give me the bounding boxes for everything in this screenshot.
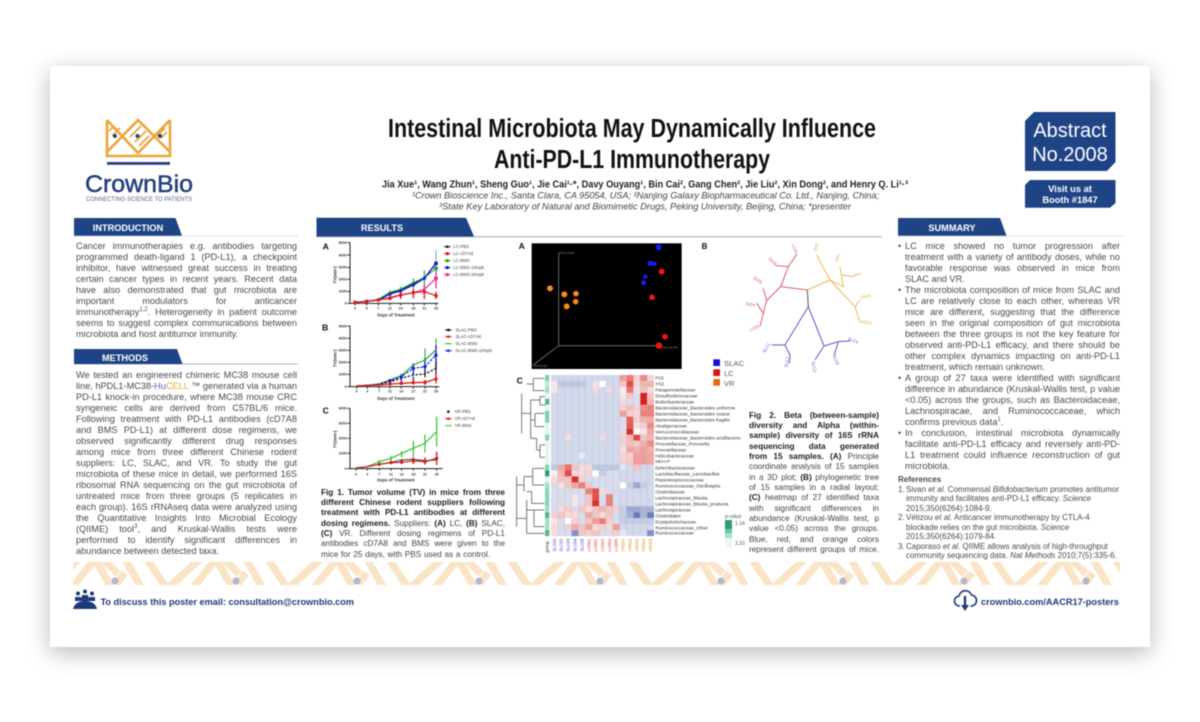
chart C: VR tumor volume: 1000 [339, 452, 347, 456]
chart B: SLAC tumor volume: 3000 [339, 349, 347, 353]
chart C: VR tumor volume: 11 [389, 472, 393, 476]
text: references: 3. [898, 542, 905, 550]
text: methods [76, 370, 298, 556]
fig 2 panel B: phylogenetic tree: VR1 [813, 242, 820, 252]
chart C: VR tumor volume: TV(mm³) [333, 430, 338, 448]
text: • [898, 241, 901, 251]
heading: introduction: INTRODUCTION [93, 223, 164, 233]
text: references: community sequencing data. Nat Methods 2010;7(5):335-6. [906, 551, 1117, 560]
legend: SLAC, LC, VR groups: VR [724, 379, 735, 388]
booth badge: Booth #1847 [1042, 195, 1098, 205]
text: summary bullets: LC mice showed no tumor progression after [905, 241, 1120, 251]
legend A: LC-BMS-10mpk [453, 265, 485, 270]
heatmap row labels [655, 375, 741, 536]
text: methods: performed to identify significant differences in [76, 535, 297, 545]
chart A: LC tumor volume: A [323, 241, 330, 251]
heatmap row labels: Ruminococcaceae [655, 531, 694, 536]
text: methods: We tested an engineered chimeric MC38 mouse cell [76, 370, 297, 380]
text: methods: each group). 16S rRNAseq data were analyzed using [76, 502, 297, 512]
poster sheet [50, 66, 1150, 647]
caption: figure 1: treatment with PD-L1 antibodies at different [321, 508, 505, 517]
legend C [445, 409, 476, 428]
caption: figure 2 [748, 410, 880, 554]
chart C: VR tumor volume: 21 [423, 472, 427, 476]
text: introduction: microbiota and host antitumor immunity. [76, 329, 238, 339]
heading: methods [74, 349, 298, 364]
caption: figure 2: Blue, red, and orange colors [749, 535, 879, 544]
fig 2 panel A: 3D PCoA scatter plot: PC2 13.9% [559, 251, 575, 255]
chart A: LC tumor volume: 3000 [339, 266, 347, 270]
chart A: LC tumor volume: 18 [411, 306, 415, 310]
chart A: LC tumor volume: 5000 [339, 241, 347, 245]
caption: figure 2: from 15 samples. (A) Principle [749, 452, 879, 461]
abstract number badge [1025, 112, 1116, 171]
chart C: VR tumor volume: 4000 [339, 407, 347, 411]
legend A: LC-cD7A8 [453, 251, 474, 256]
heatmap row labels: Bacteroidaceae_Bacteroides acidifaciens [655, 436, 741, 441]
fig 2 panel B: phylogenetic tree: VR12 [860, 293, 872, 300]
text: methods: (QIIME) tool3, and Kruskal-Wallis tests were [76, 524, 297, 534]
chart A: LC tumor volume: 0 [345, 302, 347, 306]
chart A: LC tumor volume: 25 [434, 306, 438, 310]
title: Intestinal Microbiota May Dynamically Influence [388, 115, 876, 143]
heatmap dendrogram [517, 378, 545, 533]
heatmap row labels: Alcaligenaceae [655, 424, 687, 429]
heatmap row labels: Deferribacteraceae [655, 466, 695, 471]
chart C: VR tumor volume: 7 [378, 472, 380, 476]
chart B: SLAC tumor volume: 2000 [339, 361, 347, 365]
caption: figure 2: sequencing data generated [749, 442, 879, 451]
text: methods: microbiota of these mice in detail, we performed 16S [76, 469, 297, 479]
heatmap column labels: SLC02 [559, 538, 564, 552]
fig 2 panel B: phylogenetic tree: S004 [745, 301, 756, 308]
text: references: 2015;350(6264):1079-84. [906, 532, 996, 541]
heatmap column labels: VR003 [634, 538, 639, 552]
heatmap cells [551, 375, 654, 536]
text: summary bullets: treatment with a variety of antibody doses, while no [905, 252, 1120, 262]
abstract number badge: Abstract [1033, 120, 1107, 142]
chart A: LC tumor volume: 1000 [339, 290, 347, 294]
legend A: LC-BMS-20mpk [453, 272, 485, 277]
caption: figure 1: mice for 25 days, with PBS used as a control. [321, 550, 490, 559]
legend C: VR-PBS [455, 409, 471, 414]
fig 2 panel A: 3D PCoA scatter plot: A [519, 241, 526, 251]
caption: figure 1: dosing regimens. Suppliers: (A) LC, (B) SLAC, [321, 519, 505, 528]
chart A: LC tumor volume: 5 [366, 306, 368, 310]
heatmap row labels: Bacteroidaceae_Bacteroides uniformis [655, 406, 736, 411]
text: summary bullets [898, 241, 1120, 471]
fig 2 panel A: 3D PCoA scatter plot: PC1 25.4% [663, 345, 678, 349]
chart A: LC tumor volume: 7 [377, 306, 379, 310]
heatmap row labels: Lactobacillaceae_Lactobacillus [655, 472, 720, 477]
text: methods: ribosomal RNA sequencing on the gut microbiota of [76, 480, 297, 490]
heatmap column labels: LC005 [614, 538, 619, 552]
heatmap column labels: VR004 [641, 538, 646, 552]
group colour column [545, 375, 549, 536]
caption: figure 2: sample) diversity of 16S rRNA [749, 431, 879, 440]
heatmap row labels: Erysipelotrichaceae [655, 519, 696, 524]
heading: results [316, 218, 882, 237]
legend B: SLAC-BMS [455, 341, 478, 346]
legend A: LC-PBS [453, 244, 469, 249]
legend A [444, 244, 485, 277]
decorative pattern band [73, 562, 1120, 585]
icon: people at table [73, 590, 97, 609]
chart A: LC tumor volume: 0 [354, 306, 356, 310]
chart C: VR tumor volume: Days of Treatment [377, 478, 415, 483]
text: references: Vétizou et al. Anticancer immunotherapy by CTLA-4 [906, 513, 1090, 522]
legend: SLAC, LC, VR groups: LC [724, 369, 734, 378]
text: summary bullets: treatment, which remain unknown. [905, 362, 1045, 372]
heatmap column labels: LC004 [607, 538, 612, 552]
chart B: SLAC tumor volume: 4 [366, 390, 369, 394]
text: summary bullets: A group of 27 taxa were identified with significant [905, 373, 1120, 383]
logo: CrownBio: CrownBio [85, 171, 193, 198]
text: • [898, 285, 901, 295]
text: references: References [898, 475, 941, 484]
text: methods: line, hPDL1-MC38-HuCELL ™ generated via a human [76, 381, 297, 391]
heatmap row labels: Helicobacteraceae [655, 454, 694, 459]
caption: figure 2: in a 3D plot; (B) phylogenetic tree [749, 473, 879, 482]
heatmap row labels: Peptostreptococcaceae [655, 477, 704, 482]
caption: figure 1: (C) VR. Different dosing regimens of PD-L1 [321, 529, 505, 538]
heatmap row labels: Bacteroidaceae_Bacteroides ovatus [655, 411, 731, 416]
heatmap column labels: VR005 [648, 538, 653, 552]
text: summary bullets: microbiota. [905, 461, 950, 471]
caption: figure 2: value <0.05) across the groups. [749, 524, 879, 533]
text: summary bullets: The microbiota composition of mice from SLAC and [905, 285, 1120, 295]
text: references [898, 475, 1120, 560]
heatmap row labels: Lachnospiraceae_Blautia_producta [655, 501, 729, 506]
p-value colour bar: 1.14 [735, 521, 745, 527]
icon: cloud download [954, 591, 977, 611]
caption: figure 2: abundance (Kruskal-Wallis test, p [749, 514, 879, 523]
chart B: SLAC tumor volume: TV(mm³) [333, 349, 338, 367]
fig 1 line charts [322, 241, 493, 483]
caption: figure 1 [320, 488, 506, 560]
caption: figure 1: different Chinese rodent suppliers following [321, 498, 505, 507]
chart B: SLAC tumor volume: 25 [434, 390, 438, 394]
chart B: SLAC tumor volume: 4000 [339, 337, 347, 341]
heatmap column labels: LC001 [586, 538, 591, 552]
chart A: LC tumor volume: 11 [388, 306, 392, 310]
fig 2 panel B: phylogenetic tree: SLC7 [783, 356, 790, 368]
legend C: VR-BMS [455, 423, 472, 428]
chart C: VR tumor volume: 3000 [339, 422, 347, 426]
text: references: Caporaso et al. QIIME allows analysis of high-throughput [906, 542, 1108, 550]
legend: SLAC, LC, VR groups: SLAC [724, 359, 745, 368]
affiliations [412, 190, 879, 212]
fig 2 panel C: heatmap: C [517, 375, 524, 385]
legend C: VR-cD7A8 [455, 416, 476, 421]
heatmap row labels: Prevotellaceae [655, 448, 687, 453]
chart C: VR tumor volume [323, 405, 476, 483]
text: summary bullets: L1 treatment could influence reconstruction of gut [905, 450, 1120, 460]
chart A: LC tumor volume: Days of Treatment [377, 313, 415, 318]
chart B: SLAC tumor volume: 14 [399, 390, 404, 394]
text: summary bullets: In conclusion, intestinal microbiota dynamically [905, 428, 1120, 438]
fig 2 panel B: phylogenetic tree: VR7 [834, 252, 842, 263]
chart C: VR tumor volume: 4 [366, 472, 369, 476]
text: summary bullets: seen in the original composition of gut microbiota [905, 318, 1120, 328]
text: methods: the Quantitative Insights Into Microbial Ecology [76, 513, 297, 523]
text: summary bullets: Lachnospiracae, and Ruminococcaceae, which [905, 406, 1120, 416]
text: introduction: important modulators for anticancer [76, 296, 297, 306]
caption: figure 1: antibodies cD7A8 and BMS were given to the [321, 539, 505, 548]
heatmap column labels: SLC03 [566, 538, 571, 552]
heatmap column labels: group [545, 540, 550, 553]
caption: figure 1: Fig 1. Tumor volume (TV) in mice from three [321, 488, 505, 496]
text: references: 2015;350(6264):1084-9. [906, 504, 992, 512]
fig 2 panel B: phylogenetic tree: S006 [767, 256, 778, 267]
text: • [898, 428, 901, 438]
chart C: VR tumor volume: 2000 [339, 437, 347, 441]
logo: CrownBio [85, 120, 193, 203]
chart C: VR tumor volume: C [323, 405, 330, 415]
text: methods: observed significantly different drug responses [76, 436, 297, 446]
text: summary bullets: favorable response was observed in mice from [905, 263, 1120, 273]
fig 2 panel B: phylogenetic tree: VR4 [852, 271, 862, 279]
heatmap row labels: Lachnospiraceae [655, 507, 691, 512]
legend B: SLAC-PBS [455, 327, 477, 332]
text: methods: untreated mice from three groups (5 replicates in [76, 491, 297, 501]
text: references: Sivan et al. Commensal Bifidobacterium promotes antitumor [906, 484, 1119, 494]
fig 2 panel B: phylogenetic tree: VR13 [861, 319, 872, 325]
heatmap row labels: Clostridiaceae [655, 489, 685, 494]
fig 2 panel B: phylogenetic tree: LC03 [791, 243, 799, 255]
heatmap row labels: NKH-P [655, 459, 670, 464]
heatmap row labels: Lachnospiraceae_Blautia [655, 495, 708, 500]
text: references: 1. [898, 484, 905, 494]
caption: figure 2: (C) heatmap of 27 identified taxa [749, 493, 879, 502]
affiliations: ¹Crown Bioscience Inc., Santa Clara, CA 95054, USA; ²Nanjing Galaxy Biopharmaceutical Co. Ltd., Nanjing, China; [412, 190, 879, 200]
caption: figure 2: diversity and Alpha (within- [749, 421, 879, 430]
heatmap row labels: Desulfovibrionaceae [655, 393, 698, 398]
chart C: VR tumor volume: 18 [411, 472, 415, 476]
text: methods: Following treatment with PD-L1 antibodies (cD7A8 [76, 414, 297, 424]
chart A: LC tumor volume: 21 [422, 306, 426, 310]
text: summary bullets: other complex dynamics impacting on anti-PD-L1 [905, 351, 1120, 361]
fig 2 panel B: phylogenetic tree: SLC9 [832, 354, 840, 366]
text: introduction: immunotherapy1,2. Heterogeneity in patient outcome [76, 307, 297, 317]
text: references: 2. [898, 513, 905, 522]
caption: figure 2: with significant differences in [749, 504, 879, 513]
text: methods: syngeneic cells are derived from C57BL/6 mice. [76, 403, 297, 413]
heatmap column labels: LC002 [593, 538, 598, 552]
chart A: LC tumor volume: 14 [399, 306, 404, 310]
chart B: SLAC tumor volume: 21 [423, 390, 427, 394]
title [388, 115, 876, 174]
chart C: VR tumor volume: 14 [400, 472, 405, 476]
fig 2 panel C: heatmap [517, 375, 741, 553]
logo: CrownBio: CONNECTING SCIENCE TO PATIENTS [86, 196, 192, 203]
fig 2 panel B: phylogenetic tree [702, 242, 872, 373]
chart B: SLAC tumor volume: 0 [345, 385, 347, 389]
chart C: VR tumor volume: 0 [345, 467, 347, 471]
chart B: SLAC tumor volume: Days of Treatment [377, 396, 415, 401]
fig 2 panel B: phylogenetic tree: B [702, 242, 708, 251]
text: summary bullets: observed anti-PD-L1 efficacy, and there should be [905, 340, 1120, 350]
heatmap column labels [545, 538, 653, 553]
heatmap column labels: VR001 [621, 538, 626, 552]
caption: figure 2: Fig 2. Beta (between-sample) [749, 410, 879, 420]
footer: contact email: To discuss this poster email: consultation@crownbio.com [100, 597, 354, 608]
text: summary bullets: between the three groups is not the key feature for [905, 329, 1120, 339]
heatmap row labels: Butleribacteraceae [655, 399, 695, 404]
text: introduction: have also demonstrated that gut microbiota are [76, 285, 297, 295]
heatmap row labels: P15 [655, 375, 664, 380]
fig 2 panel A: 3D PCoA scatter plot [519, 241, 682, 369]
fig 2 panel B: phylogenetic tree: SLC1 [762, 341, 772, 354]
chart A: LC tumor volume: TV(mm³) [333, 266, 338, 284]
legend A: LC-BMS [453, 258, 470, 263]
text: introduction [76, 241, 298, 340]
heatmap row labels: Bacteroidaceae_Bacteroides fragilis [655, 417, 730, 422]
text: methods: among mice from three different Chinese rodent [76, 447, 297, 457]
text: summary bullets: mice are different, suggesting that the difference [905, 307, 1120, 317]
p-value colour bar: 3.33 [735, 541, 745, 547]
text: introduction: inhibitor, have witnessed great success in treating [76, 263, 297, 273]
text: methods: PD-L1 knock-in procedure, where MC38 mouse CRC [76, 392, 297, 402]
chart B: SLAC tumor volume: 0 [356, 390, 358, 394]
authors: Jia Xue¹, Wang Zhun¹, Sheng Guo¹, Jie Cai¹·*, Davy Ouyang¹, Bin Cai², Gang Chen², Jie Liu², Xin Dong², and Henry Q. Li¹·³ [382, 180, 909, 190]
legend B: SLAC-cD7A8 [455, 334, 482, 339]
fig 2 panel A: 3D PCoA scatter plot: PC3 8.9% [534, 364, 548, 368]
fig 2 panel B: phylogenetic tree: LC05 [748, 323, 760, 333]
fig 2 panel B: phylogenetic tree: SLC3 [811, 361, 818, 373]
chart B: SLAC tumor volume: B [322, 323, 328, 333]
legend: SLAC, LC, VR groups [713, 359, 745, 388]
legend B [445, 327, 493, 353]
heatmap column labels: SLC05 [579, 538, 584, 552]
text: introduction: certain cancer types in recent years. Recent data [76, 274, 297, 284]
p-value colour bar [725, 514, 745, 547]
text: summary bullets: SLAC and VR. [905, 274, 965, 284]
chart B: SLAC tumor volume: 1000 [339, 373, 347, 377]
text: methods: suppliers: LC, SLAC, and VR. To study the gut [76, 458, 297, 468]
abstract number badge: No.2008 [1032, 144, 1108, 166]
text: references: blockade relies on the gut microbiota. Science [906, 522, 1069, 532]
heading: methods: METHODS [102, 353, 148, 363]
p-value colour bar: p-value [725, 514, 742, 520]
heatmap column labels: SLC01 [552, 538, 557, 552]
fig 2 panel B: phylogenetic tree: S005 [752, 275, 764, 285]
text: summary bullets: difference in abundance (Kruskal-Wallis test, p value [905, 384, 1120, 394]
legend B: SLAC-BMS-10mpk [455, 348, 493, 353]
chart B: SLAC tumor volume: 11 [388, 390, 392, 394]
text: introduction: seems to suggest complex communications between [76, 318, 297, 328]
heading: summary: SUMMARY [928, 223, 976, 233]
chart C: VR tumor volume: 0 [355, 472, 357, 476]
text: methods: abundance between detected taxa. [76, 546, 219, 556]
text: summary bullets: <0.05) across the groups, such as Bacteroidaceae, [905, 395, 1120, 405]
fig 2 panel B: phylogenetic tree: SLC4 [847, 336, 859, 345]
caption: figure 2: represent different groups of mice. [749, 545, 879, 554]
heatmap column labels: LC003 [600, 538, 605, 552]
heatmap row labels: Clostridiales [655, 513, 681, 518]
chart A: LC tumor volume [323, 241, 485, 318]
heatmap row labels: YS2 [655, 381, 665, 386]
caption: figure 2: coordinate analysis of 15 samples [749, 462, 879, 471]
text: summary bullets: LC are relatively close to each other, whereas VR [905, 296, 1120, 306]
text: • [898, 373, 901, 383]
booth badge: Visit us at [1048, 184, 1092, 194]
text: references: immunity and facilitates anti-PD-L1 efficacy. Science [906, 494, 1091, 503]
title: Anti-PD-L1 Immunotherapy [494, 146, 771, 174]
booth badge [1025, 180, 1116, 208]
text: methods: and BMS PD-L1) at different dose regimens, we [76, 425, 297, 435]
heatmap column labels: SLC04 [573, 538, 578, 552]
text: summary bullets: confirms previous data1. [905, 417, 1003, 427]
chart A: LC tumor volume: 4000 [339, 253, 347, 257]
heatmap row labels: Paraprevotellaceae [655, 387, 696, 392]
chart B: SLAC tumor volume: 5000 [339, 324, 347, 328]
chart A: LC tumor volume: 2000 [339, 278, 347, 282]
heatmap column labels: VR002 [627, 538, 632, 552]
heatmap row labels: Prevotellaceae_Prevotella [655, 442, 710, 447]
heading: introduction [74, 218, 298, 236]
chart B: SLAC tumor volume [322, 323, 493, 401]
caption: figure 2: of 15 samples in a radial layout; [749, 483, 879, 492]
heatmap row labels: Ruminococcaceae_Other [655, 525, 708, 530]
heatmap row labels: Verrucomicrobiaceae [655, 430, 699, 435]
text: summary bullets: facilitate anti-PD-L1 efficacy and reversely anti-PD- [905, 439, 1120, 449]
affiliations: ³State Key Laboratory of Natural and Biomimetic Drugs, Peking University, Beijing, China; *presenter [439, 202, 852, 212]
footer: poster url: crownbio.com/AACR17-posters [981, 597, 1119, 608]
text: introduction: programmed death-ligand 1 (PD-L1), a checkpoint [76, 252, 297, 262]
heading: summary [898, 218, 1124, 236]
chart B: SLAC tumor volume: 17 [411, 390, 415, 394]
chart B: SLAC tumor volume: 7 [378, 390, 380, 394]
chart C: VR tumor volume: 25 [435, 472, 439, 476]
heading: results: RESULTS [361, 223, 403, 233]
text: introduction: Cancer immunotherapies e.g. antibodies targeting [76, 241, 297, 251]
icon: crown [107, 120, 170, 165]
heatmap row labels: Ruminococcaceae_Oscillospira [655, 483, 721, 488]
